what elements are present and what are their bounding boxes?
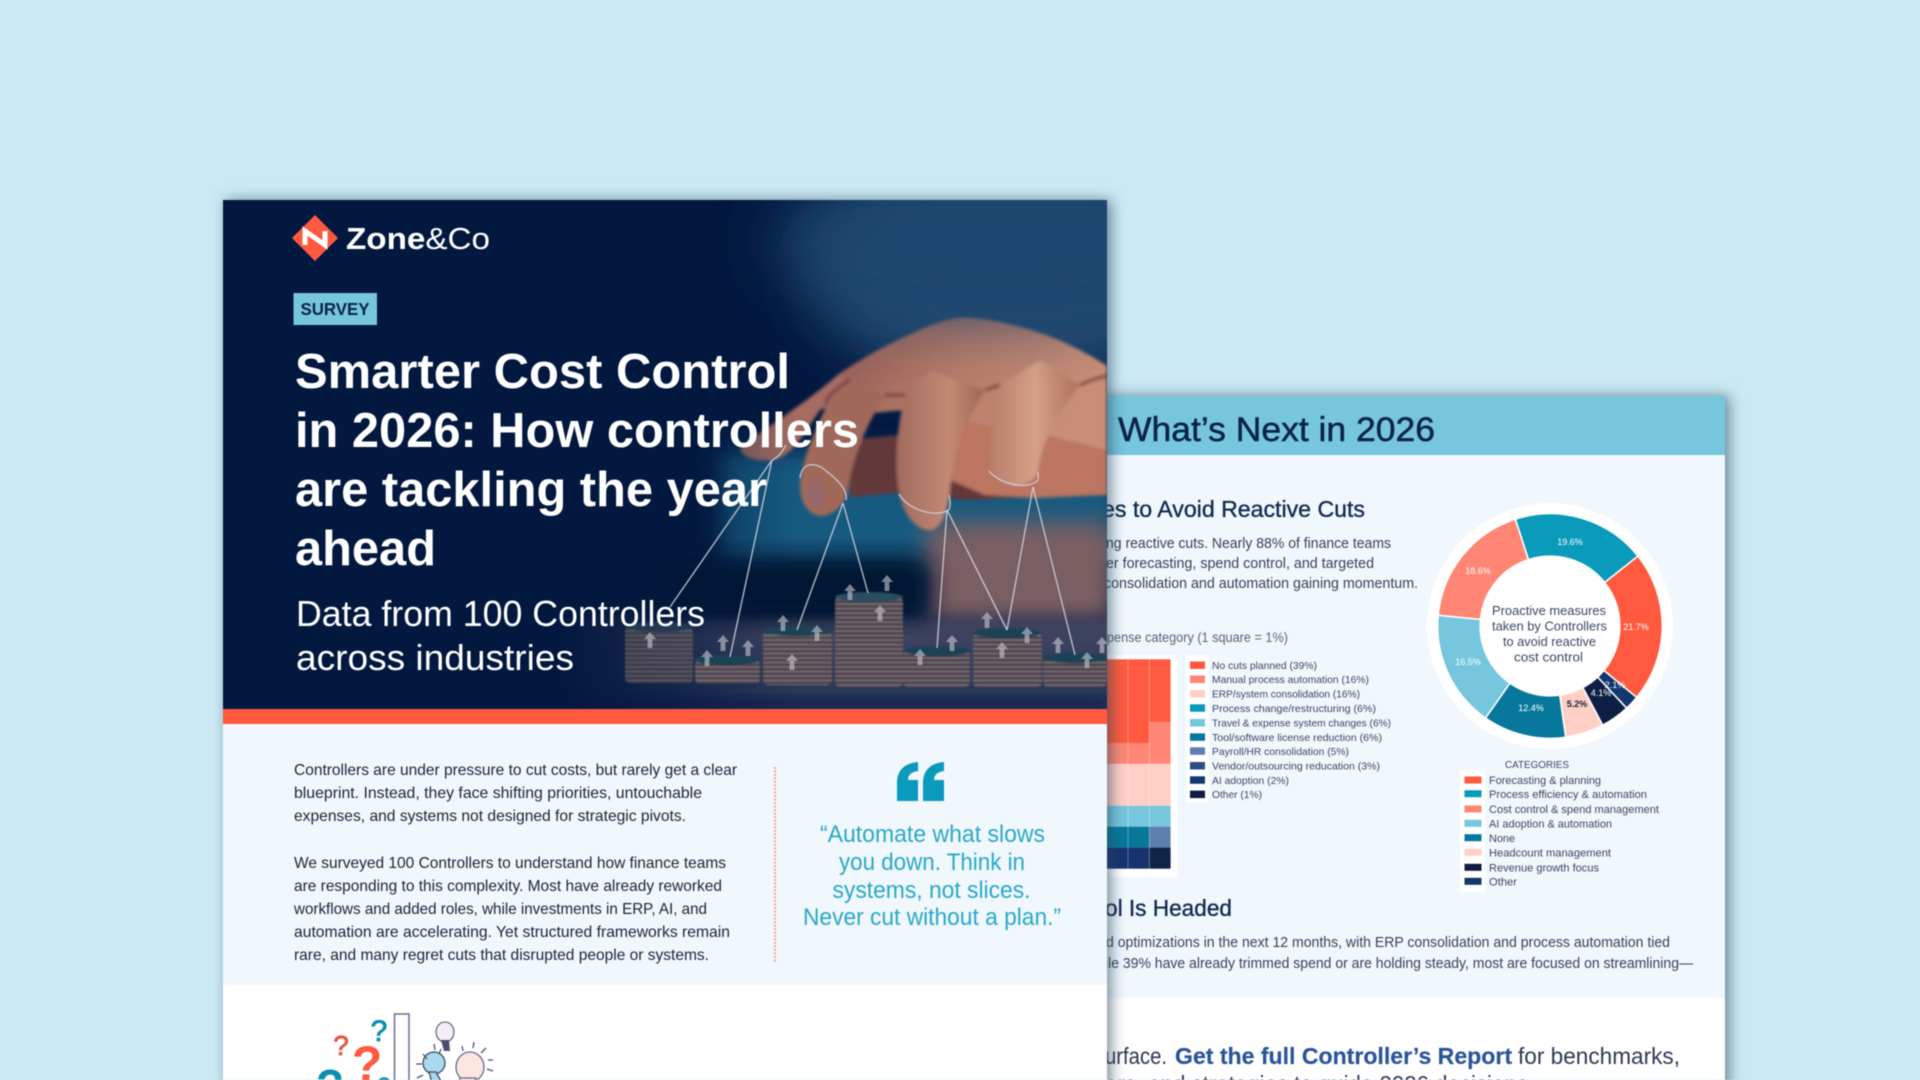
legend: expense categories bbox=[1186, 655, 1391, 803]
legend: expense categories: Payroll/HR consolidation (5%) bbox=[1212, 746, 1349, 758]
logo: Zone&Co bbox=[346, 221, 490, 256]
donut chart: 2.1% bbox=[1605, 680, 1625, 690]
intro panel background bbox=[223, 724, 1107, 985]
donut chart: Proactive measures bbox=[1492, 604, 1606, 618]
intro text: rare, and many regret cuts that disrupted people or systems. bbox=[294, 947, 709, 964]
intro text: We surveyed 100 Controllers to understand how finance teams bbox=[294, 855, 726, 872]
hand bbox=[741, 318, 1107, 530]
subtitle: Data from 100 Controllers bbox=[296, 593, 705, 634]
strings and rings bbox=[670, 445, 1075, 657]
legend: expense categories: Tool/software license reduction (6%) bbox=[1212, 732, 1382, 744]
subtitle bbox=[296, 593, 705, 678]
intro text: are responding to this complexity. Most have already reworked bbox=[294, 878, 722, 895]
pull quote: “Automate what slows bbox=[820, 821, 1045, 848]
legend: donut categories: CATEGORIES bbox=[1505, 759, 1569, 771]
legend: donut categories: Cost control & spend management bbox=[1489, 804, 1659, 816]
donut chart: to avoid reactive bbox=[1503, 635, 1596, 649]
donut chart: 5.2% bbox=[1567, 699, 1587, 709]
legend: expense categories: Other (1%) bbox=[1212, 789, 1262, 801]
section heading: reactive cuts: es to Avoid Reactive Cuts bbox=[1102, 496, 1365, 522]
legend: donut categories: Forecasting & planning bbox=[1489, 775, 1601, 787]
intro text: blueprint. Instead, they face shifting priorities, untouchable bbox=[294, 785, 702, 802]
legend: expense categories: Vendor/outsourcing reducation (3%) bbox=[1212, 760, 1380, 772]
text block: where control is headed bbox=[1105, 934, 1693, 972]
intro text: Controllers are under pressure to cut costs, but rarely get a clear bbox=[294, 762, 738, 779]
donut chart: cost control bbox=[1514, 650, 1583, 664]
back page light body bbox=[1000, 455, 1725, 998]
panel: back page What's Next in 2026 bbox=[1000, 396, 1725, 1080]
accent bar bbox=[223, 709, 1107, 724]
call to action: Get the full Controller’s Report bbox=[1175, 1043, 1512, 1069]
donut chart: 12.4% bbox=[1518, 703, 1544, 713]
front page sheet bbox=[223, 200, 1107, 1080]
photo left fade bbox=[224, 418, 787, 709]
section heading: where control is headed: ol Is Headed bbox=[1105, 895, 1232, 921]
illustration: question marks and light bulbs: ? bbox=[371, 1015, 387, 1048]
quote mark icon bbox=[897, 762, 944, 801]
title: in 2026: How controllers bbox=[295, 404, 859, 458]
legend: donut categories: Other bbox=[1489, 876, 1517, 888]
legend: donut categories bbox=[1460, 759, 1659, 892]
chart caption: pense category (1 square = 1%) bbox=[1107, 630, 1288, 645]
legend: expense categories: Manual process automation (16%) bbox=[1212, 674, 1369, 686]
coin stacks bbox=[625, 592, 1107, 687]
title: Smarter Cost Control bbox=[295, 345, 790, 399]
legend: expense categories: AI adoption (2%) bbox=[1212, 775, 1289, 787]
text block: where control is headed: d optimizations in the next 12 months, with ERP consolidation and process automation tied bbox=[1106, 934, 1670, 951]
legend: expense categories: ERP/system consolidation (16%) bbox=[1212, 688, 1360, 700]
legend: expense categories: Process change/restructuring (6%) bbox=[1212, 703, 1376, 715]
donut chart bbox=[1427, 503, 1673, 749]
illustration: question marks and light bulbs: ? bbox=[333, 1030, 349, 1061]
text block: reactive cuts: ng reactive cuts. Nearly 88% of finance teams bbox=[1106, 535, 1391, 552]
legend: donut categories: Revenue growth focus bbox=[1489, 862, 1600, 874]
text block: reactive cuts: consolidation and automation gaining momentum. bbox=[1104, 575, 1418, 592]
text block: reactive cuts: er forecasting, spend control, and targeted bbox=[1106, 555, 1374, 572]
legend: donut categories: Process efficiency & automation bbox=[1489, 789, 1647, 801]
donut chart: 16.5% bbox=[1455, 657, 1481, 667]
intro text: automation are accelerating. Yet structured frameworks remain bbox=[294, 924, 730, 941]
subtitle: across industries bbox=[296, 637, 574, 678]
call to action: for benchmarks, bbox=[1518, 1043, 1680, 1069]
legend: expense categories: No cuts planned (39%) bbox=[1212, 660, 1317, 672]
illustration: question marks and light bulbs bbox=[316, 1014, 493, 1080]
call to action: urface. bbox=[1105, 1043, 1167, 1069]
waffle chart bbox=[1100, 655, 1178, 877]
title: are tackling the year bbox=[295, 463, 767, 517]
badge: survey bbox=[294, 293, 377, 325]
legend: donut categories: None bbox=[1489, 833, 1515, 845]
legend: donut categories: AI adoption & automation bbox=[1489, 818, 1612, 830]
donut chart: 21.7% bbox=[1623, 622, 1649, 632]
dotted divider bbox=[774, 767, 776, 963]
legend: expense categories: Travel & expense system changes (6%) bbox=[1212, 718, 1391, 730]
legend: donut categories: Headcount management bbox=[1489, 848, 1611, 860]
intro text: expenses, and systems not designed for strategic pivots. bbox=[294, 808, 686, 825]
pull quote bbox=[803, 821, 1061, 931]
call to action bbox=[1105, 1043, 1680, 1080]
title: ahead bbox=[295, 522, 436, 576]
pull quote: Never cut without a plan.” bbox=[803, 904, 1061, 931]
growth arrows bbox=[644, 575, 1108, 670]
badge: survey: SURVEY bbox=[300, 299, 370, 319]
photo backdrop bbox=[223, 150, 1210, 728]
donut chart: taken by Controllers bbox=[1492, 620, 1607, 634]
pull quote: you down. Think in bbox=[839, 849, 1025, 876]
header band bbox=[1000, 396, 1725, 455]
pull quote: systems, not slices. bbox=[832, 877, 1030, 904]
title bbox=[295, 345, 859, 576]
panel: front page bbox=[217, 190, 1122, 1080]
hero photo: hand and coins bbox=[222, 199, 1108, 710]
donut chart: 4.1% bbox=[1591, 688, 1611, 698]
page heading: What’s Next in 2026 bbox=[1118, 411, 1435, 449]
text block: where control is headed: ile 39% have already trimmed spend or are holding steady, most are focused on streamlining— bbox=[1105, 955, 1693, 972]
text block: reactive cuts bbox=[1104, 535, 1418, 592]
photo blue tint over upper hand bbox=[764, 200, 1092, 366]
intro text bbox=[293, 762, 738, 964]
donut chart: 18.6% bbox=[1465, 566, 1491, 576]
intro text: workflows and added roles, while investments in ERP, AI, and bbox=[293, 901, 707, 918]
logo bbox=[292, 215, 490, 261]
donut chart: 19.6% bbox=[1557, 537, 1583, 547]
back page sheet bbox=[1000, 396, 1725, 1080]
